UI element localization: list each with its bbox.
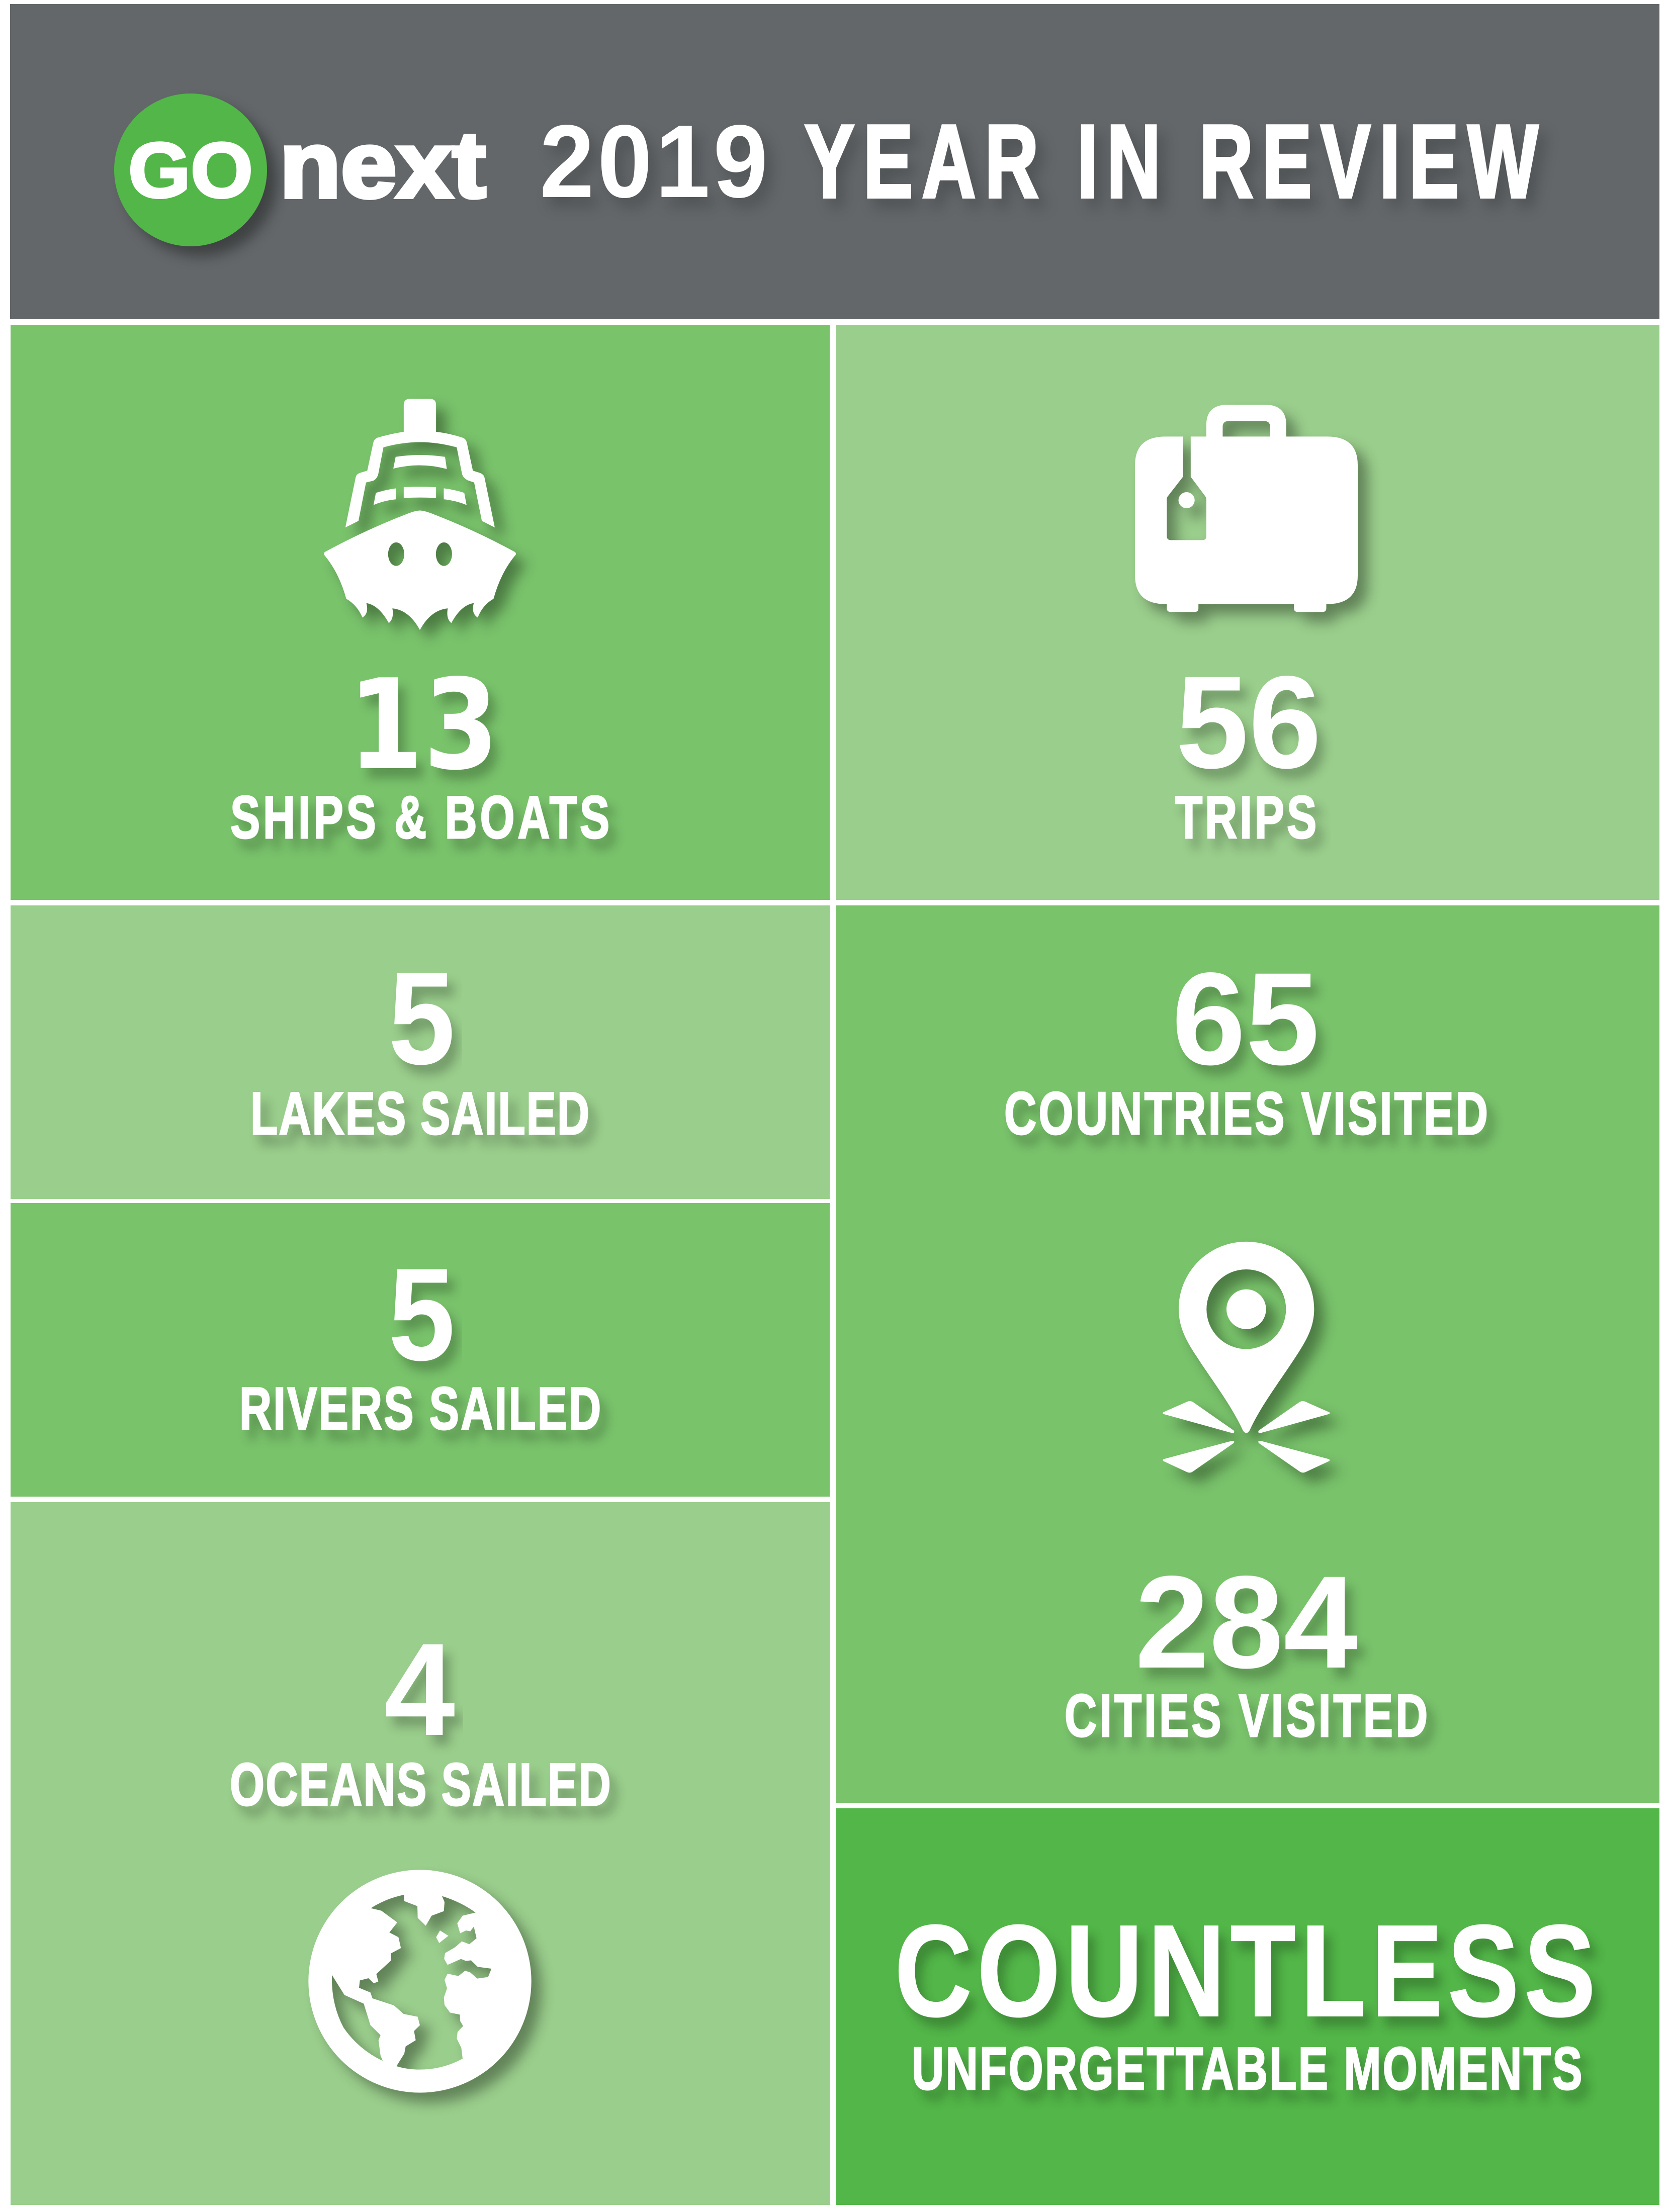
heading: countless: COUNTLESS — [895, 1898, 1596, 2044]
panel: lakes sailed — [11, 905, 830, 1199]
panel: rivers sailed — [11, 1203, 830, 1497]
logo text GO: GO — [128, 127, 253, 214]
panel: oceans sailed — [11, 1502, 830, 2205]
number: 13: 13 — [348, 653, 499, 798]
icon: suitcase — [1135, 405, 1358, 612]
icon: map pin — [1163, 1242, 1330, 1472]
label: countries visited: COUNTRIES VISITED — [1004, 1080, 1488, 1147]
panel: header — [10, 4, 1659, 319]
number: 5 lakes: 5 — [388, 945, 455, 1092]
label: oceans sailed: OCEANS SAILED — [230, 1751, 611, 1818]
panel: trips — [836, 325, 1659, 900]
logo text next: next — [280, 112, 486, 217]
number: 5 rivers: 5 — [388, 1241, 455, 1388]
title: YEAR IN REVIEW — [805, 104, 1538, 220]
number: 65: 65 — [1172, 945, 1320, 1092]
icon: ship — [324, 399, 516, 630]
panel: ships and boats — [11, 325, 830, 900]
number: 56: 56 — [1176, 649, 1322, 796]
label: unforgettable moments: UNFORGETTABLE MOMENTS — [912, 2035, 1582, 2102]
panel: countless moments — [836, 1808, 1659, 2205]
logo: GOnext — [114, 94, 486, 246]
label: trips: TRIPS — [1175, 784, 1316, 851]
logo circle — [114, 94, 267, 246]
title: 2019 — [540, 103, 768, 219]
label: rivers sailed: RIVERS SAILED — [239, 1375, 601, 1442]
number: 4: 4 — [384, 1616, 456, 1763]
icon: globe — [308, 1870, 532, 2093]
number: 284: 284 — [1135, 1548, 1359, 1696]
label: lakes sailed: LAKES SAILED — [250, 1080, 589, 1147]
label: cities visited: CITIES VISITED — [1065, 1682, 1428, 1749]
panel: countries and cities visited — [836, 905, 1659, 1803]
label: ships and boats: SHIPS & BOATS — [230, 784, 609, 851]
